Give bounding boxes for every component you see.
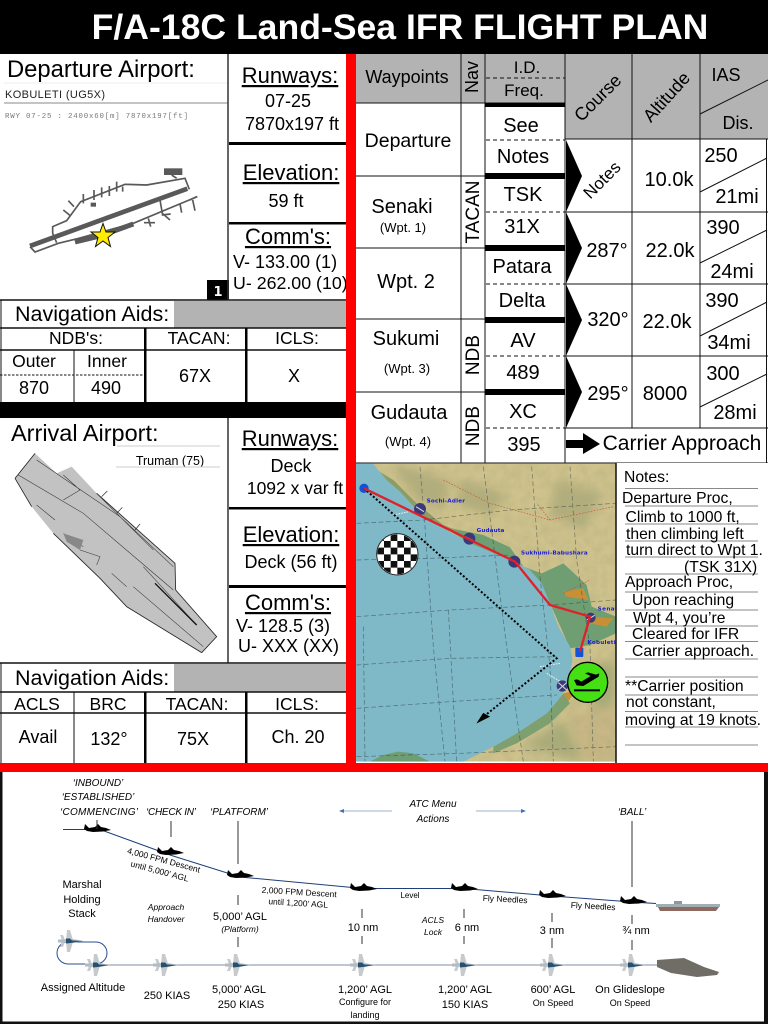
bottom row labels: Configure for [339,997,391,1007]
bottom row labels: 250 KIAS [144,990,190,1002]
bottom row labels: landing [350,1010,380,1020]
red horizontal divider [0,763,768,772]
approach procedure: Approach Proc, [625,574,733,591]
plan view aircraft [58,930,646,976]
TACAN column: 75X [177,729,209,749]
ID and frequency values: AV [510,330,536,352]
mid annotations: 3 nm [540,925,564,937]
course values: Notes [580,158,625,203]
altitude values: 10.0k [645,169,694,191]
BRC column [90,694,128,749]
runways box [242,426,343,498]
speed and distance values: 250 [704,145,738,167]
TACAN column: TACAN: [166,694,228,714]
ACLS column: ACLS [14,694,60,714]
table headers: Dis. [722,113,754,133]
table headers: Freq. [504,81,544,100]
ICLS column: Ch. 20 [271,727,325,747]
bottom row labels: 250 KIAS [218,999,264,1011]
bottom row labels: On Speed [610,998,650,1008]
bottom row labels: On Glideslope [595,984,665,996]
dotted carrier track [364,488,557,723]
marshal holding stack label: Holding [63,894,101,906]
TACAN column: TACAN: [168,328,230,348]
airport name: KOBULETI (UG5X) [5,89,105,101]
panel: arrival navigation aids [0,663,346,763]
runways box: 1092 x var ft [247,478,343,498]
table headers: I.D. [514,58,540,77]
panel: carrier approach profile [0,772,768,1024]
icon: green departure circle [568,662,608,702]
radio calls: ‘BALL’ [618,807,647,818]
map place labels: Sochi-Adler [427,499,465,505]
course values [580,158,629,405]
mid annotations: 10 nm [348,922,378,934]
elevation box: Elevation: [243,522,339,547]
waypoint names: (Wpt. 3) [384,361,430,376]
bottom row labels: Assigned Altitude [41,982,125,994]
notes heading: Notes: [624,469,669,486]
carrier position note [625,678,761,729]
ID and frequency values: 489 [506,362,540,384]
panel: departure airport [0,54,348,402]
marshal holding stack label [62,879,102,920]
ID and frequency values: 31X [504,216,540,238]
ICLS column [271,694,325,747]
panel: arrival airport [11,418,346,663]
course arrows [566,140,582,428]
waypoint names: Wpt. 2 [377,271,435,293]
carrier approach label: Carrier Approach [603,432,761,455]
TACAN column [166,694,228,749]
bottom row labels: 150 KIAS [442,999,488,1011]
ICLS column: X [288,366,300,386]
radio calls: ‘CHECK IN’ [146,807,197,818]
icon: yellow star [91,224,115,246]
ID and frequency values [493,115,552,456]
approach procedure: Cleared for IFR [632,626,739,643]
descent labels: 2,000 FPM Descent [261,885,338,899]
page badge [207,280,229,300]
page badge: 1 [213,285,223,300]
altitude values [643,169,695,405]
comms box [236,590,339,656]
marshal holding stack label: Marshal [62,879,102,891]
plan view track [100,964,660,966]
course values: 295° [587,383,629,405]
runways box: Runways: [242,426,338,451]
mid annotations [147,902,650,937]
ICLS column [275,328,319,386]
airfield markers [359,484,596,692]
descent labels [126,846,616,912]
elevation box [243,522,339,572]
red vertical divider [346,54,356,764]
waypoint names: Gudauta [371,402,448,424]
comms box: Comm's: [245,590,331,615]
BRC column: BRC [90,694,126,714]
departure heading: Departure Airport: [7,56,195,83]
navigation aids heading: Navigation Aids: [15,302,169,326]
title: F/A-18C Land-Sea IFR FLIGHT PLAN [92,7,708,47]
flight route [364,488,590,652]
radio calls: ‘PLATFORM’ [210,807,269,818]
TACAN column: 67X [179,366,211,386]
ID and frequency values: XC [509,401,537,423]
course values: 287° [586,240,628,262]
descent labels: until 1,200’ AGL [268,896,329,910]
waypoint names: (Wpt. 4) [385,434,431,449]
waypoint names: Senaki [371,196,433,218]
waypoint names: Sukumi [373,328,439,350]
ID and frequency values: 395 [507,434,541,456]
map place labels: Kobuleti [587,640,616,646]
ATC menu actions [339,799,526,825]
speed and distance values: 21mi [715,186,759,208]
altitude values: 22.0k [646,240,695,262]
map [356,463,621,762]
ICLS column: ICLS: [275,694,319,714]
descent labels: Level [400,891,420,900]
bottom row labels [41,982,665,1020]
mid annotations: 5,000’ AGL [213,911,267,923]
bottom row labels: 600’ AGL [531,984,575,996]
ACLS column: Avail [19,727,57,747]
nav types: TACAN [463,181,484,243]
navigation aids heading: Navigation Aids: [15,666,169,690]
mid annotations: Lock [424,927,443,937]
departure procedure: Departure Proc, [622,490,733,507]
bottom row labels: 5,000’ AGL [212,984,266,996]
elevation box [243,160,339,211]
speed and distance values: 390 [705,290,739,312]
panel: departure navigation aids [0,300,346,402]
NDB column: 870 [19,378,49,398]
bottom row labels: 1,200’ AGL [338,984,392,996]
arrival heading: Arrival Airport: [11,420,159,446]
ID and frequency values: Patara [493,256,552,278]
comms box: U- XXX (XX) [238,636,339,656]
icon: carrier plan view [657,958,719,977]
approach procedure [625,574,754,660]
elevation box: Elevation: [243,160,339,185]
speed and distance values: 390 [706,217,740,239]
speed and distance values: 34mi [707,332,751,354]
nav types: NDB [463,335,484,375]
arrow: carrier approach [566,433,600,454]
panel: waypoint table [356,54,768,463]
departure procedure: Climb to 1000 ft, [626,509,740,526]
radio calls: ‘ESTABLISHED’ [62,792,135,803]
speed and distance values: 300 [706,363,740,385]
approach procedure: Wpt 4, you’re [633,610,726,627]
ATC menu actions: Actions [416,814,449,825]
comms box: V- 128.5 (3) [236,616,330,636]
table headers: Course [570,70,625,125]
table header shading [356,54,768,139]
waypoint names: (Wpt. 1) [380,220,426,235]
holding pattern track [57,942,107,964]
altitude values: 8000 [643,383,687,405]
elevation box: Deck (56 ft) [244,552,338,572]
bottom row labels: 1,200’ AGL [438,984,492,996]
runways box: 7870x197 ft [245,114,339,134]
marshal holding stack label: Stack [68,908,96,920]
map place labels: Senaki [598,607,621,613]
radio calls: ‘INBOUND’ [73,778,124,789]
runways box: Deck [270,456,313,476]
approach procedure: Carrier approach. [632,643,754,660]
ICLS column: ICLS: [275,328,319,348]
speed and distance values: 28mi [713,402,757,424]
map place labels [427,499,621,646]
black divider band [0,402,346,418]
comms box: V- 133.00 (1) [233,252,337,272]
approach procedure: Upon reaching [632,592,734,609]
mid annotations: 6 nm [455,922,479,934]
ID and frequency values: Notes [497,146,549,168]
table headers [365,58,754,133]
TACAN column [168,328,230,386]
mid annotations: ¾ nm [622,925,650,937]
altitude values: 22.0k [643,311,692,333]
carrier position note: **Carrier position [625,678,744,695]
panel: notes [616,463,768,763]
runway data line: RWY 07-25 : 2400x60[m] 7870x197[ft] [5,113,188,121]
table headers: Waypoints [365,67,449,87]
mid annotations: Handover [148,914,186,924]
NDB column: 490 [91,378,121,398]
table headers: Nav [462,61,482,93]
table headers: Altitude [639,68,694,126]
elevation box: 59 ft [268,191,304,211]
mid annotations: Approach [147,902,184,912]
mid annotations: ACLS [421,915,444,925]
bottom row labels: On Speed [533,998,573,1008]
speed and distance values: 24mi [710,261,754,283]
waypoint names [365,130,451,449]
carrier deck diagram [15,453,217,653]
nav types [463,181,484,446]
radio calls: ‘COMMENCING’ [60,807,139,818]
descent labels: Fly Needles [570,900,616,912]
runways box [242,63,339,134]
runways box: Runways: [242,63,338,88]
mid annotations: (Platform) [221,924,259,934]
carrier position note: moving at 19 knots. [625,712,761,729]
speed and distance values [704,145,759,424]
nav types: NDB [463,406,484,446]
map place labels: Sukhumi-Babushara [521,550,588,556]
carrier name: Truman (75) [136,454,204,468]
carrier position note: not constant, [626,694,716,711]
ACLS column [14,694,60,747]
departure procedure [622,490,763,576]
title bar [0,0,768,54]
table headers: IAS [711,65,741,85]
departure procedure: (TSK 31X) [684,559,757,576]
NDB column: Inner [87,351,127,371]
profile aircraft [84,824,647,904]
comms box [233,224,348,293]
marker ticks [97,820,632,950]
descent labels: 4,000 FPM Descent [126,846,202,875]
ID and frequency values: TSK [504,184,543,206]
runways box: 07-25 [265,91,311,111]
BRC column: 132° [90,729,128,749]
airport diagram [30,168,197,252]
ID and frequency values: See [503,115,539,137]
ID and frequency values: Delta [499,290,546,312]
comms box: U- 262.00 (10) [233,273,348,293]
icon: carrier side view [656,901,720,911]
descent labels: until 5,000’ AGL [130,859,190,884]
icon: checkered flag circle [377,534,418,575]
NDB column: NDB's: [49,328,103,348]
course values: 320° [587,309,629,331]
radio calls [60,778,647,818]
NDB column [12,328,127,398]
descent flight path [63,830,656,904]
comms box: Comm's: [245,224,331,249]
map place labels: Gudauta [477,528,505,534]
descent labels: Fly Needles [482,893,528,905]
ATC menu actions: ATC Menu [408,799,457,810]
waypoint names: Departure [365,130,451,152]
NDB column: Outer [12,351,56,371]
departure procedure: turn direct to Wpt 1. [626,542,763,559]
departure procedure: then climbing left [626,526,744,543]
